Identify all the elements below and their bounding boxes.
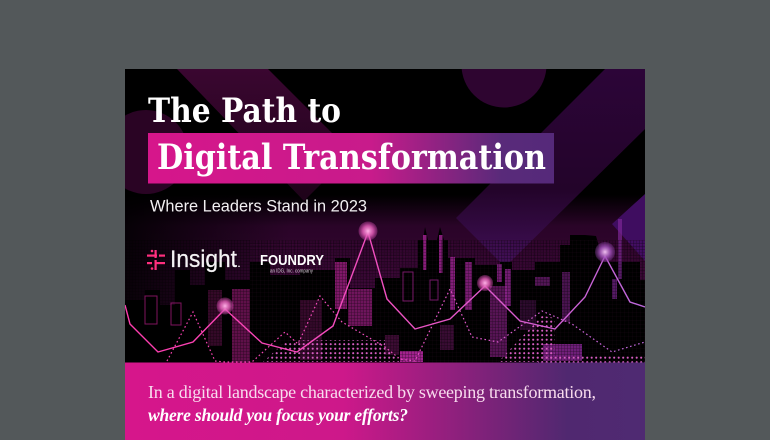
intro question: where should you focus your efforts? (148, 405, 408, 425)
background shape: right corner diamond (612, 194, 645, 261)
heading box: Digital Transformation: Digital Transformation (157, 137, 546, 178)
background shape: right diagonal band (456, 69, 645, 267)
city sky glow (125, 201, 645, 305)
skyline outlined buildings (145, 272, 438, 325)
subtitle: Where Leaders Stand in 2023 (150, 198, 367, 216)
halftone dots (263, 316, 645, 363)
logo tagline: an IDG, Inc. company (270, 268, 313, 274)
city skyline (125, 219, 645, 363)
chart: solid trend line (125, 232, 645, 352)
panel: intro band (125, 362, 645, 440)
chart: highlight markers (216, 222, 615, 314)
background shape: top circle (462, 69, 546, 108)
logo: Foundry (260, 255, 324, 274)
icon: Insight mark (147, 250, 165, 270)
chart: dotted trend line (167, 289, 645, 362)
logo wordmark: Foundry: FOUNDRY (260, 252, 324, 269)
skyline lit buildings (208, 219, 622, 362)
heading: The Path to: The Path to (148, 91, 341, 131)
skyline silhouette (125, 227, 645, 363)
logo wordmark: Insight: Insight (170, 246, 237, 273)
background shape: left circle (125, 110, 184, 194)
logo: Insight (147, 249, 240, 272)
intro text line: In a digital landscape characterized by sweeping transformation, (148, 382, 596, 402)
panel: hero banner (125, 69, 645, 362)
background shape: left diagonal band (177, 69, 332, 201)
